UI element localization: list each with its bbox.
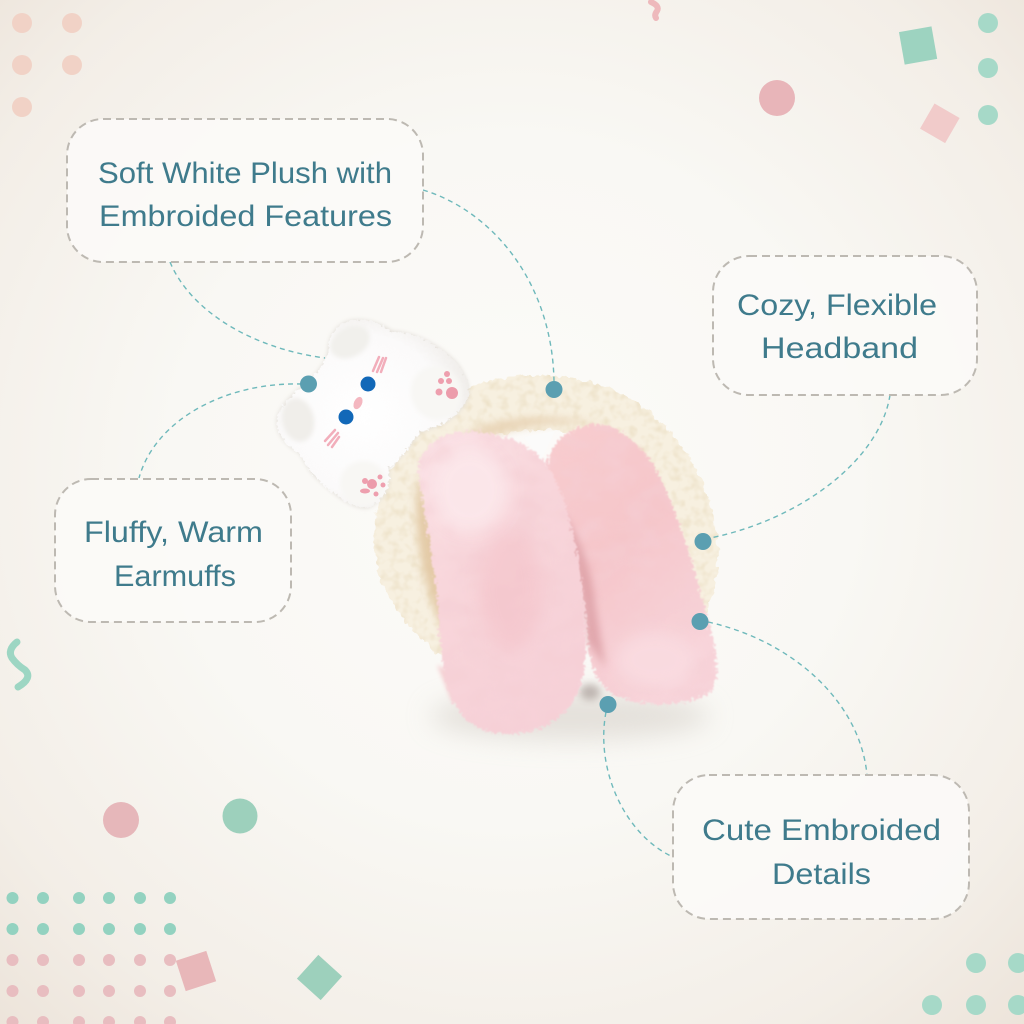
headband upper shading	[470, 417, 600, 445]
callout: soft white plush	[67, 119, 423, 262]
headband inner shading	[416, 475, 448, 640]
bear ear: left	[278, 395, 318, 445]
earmuff: front pink	[418, 431, 586, 734]
callout text: headband	[737, 289, 937, 365]
bear paw: lower	[335, 456, 391, 510]
callout: earmuffs	[55, 479, 291, 622]
product: plush earmuffs	[277, 319, 718, 740]
bear nose	[352, 395, 364, 411]
callout text: embroidered details	[702, 814, 941, 891]
decorative shapes: lower left	[176, 951, 342, 1000]
callout: headband	[713, 256, 977, 395]
decorative dots: bottom right	[922, 953, 1024, 1015]
bear body	[277, 320, 469, 508]
bear paw: upper	[403, 359, 469, 427]
callout dots	[300, 376, 712, 713]
earmuff: rear pink	[546, 424, 716, 704]
earmuff: rear highlight	[615, 632, 695, 688]
decorative shapes: top right	[759, 26, 960, 143]
callout text: soft white plush	[98, 157, 392, 233]
callout text: headband: Headband	[761, 332, 918, 365]
earmuff: rear shading	[556, 505, 606, 668]
callout text: earmuffs: Fluffy, Warm	[84, 516, 263, 549]
decorative squiggle: left	[10, 642, 28, 687]
callout: embroidered details	[673, 775, 969, 919]
callout text: earmuffs: Earmuffs	[114, 560, 236, 593]
decorative dot grid: lower left	[6, 892, 176, 1024]
earmuff: front mottling	[478, 530, 542, 650]
bear plush charm	[277, 319, 469, 510]
decorative circles: lower left	[103, 798, 258, 838]
callout text: embroidered details: Cute Embroided	[702, 814, 941, 847]
callout text: soft white plush: Embroided Features	[99, 200, 392, 233]
bear edge shade	[277, 320, 469, 508]
headband	[374, 375, 718, 668]
bear eyes	[338, 376, 376, 424]
shadow between muffs	[580, 684, 600, 700]
decorative squiggle: top	[651, 2, 658, 18]
rear muff peek	[437, 665, 470, 705]
callout text: earmuffs	[84, 516, 263, 593]
white inner gap	[524, 431, 555, 460]
callout text: headband: Cozy, Flexible	[737, 289, 937, 322]
decorative dots: top left	[12, 13, 82, 117]
connector lines	[139, 190, 890, 857]
callout text: soft white plush: Soft White Plush with	[98, 157, 392, 190]
callout text: embroidered details: Details	[772, 858, 871, 891]
decorative dots: top right	[978, 13, 998, 125]
bear blush	[325, 357, 386, 447]
bear ear: top	[324, 319, 376, 365]
earmuff: front highlight	[432, 448, 508, 532]
